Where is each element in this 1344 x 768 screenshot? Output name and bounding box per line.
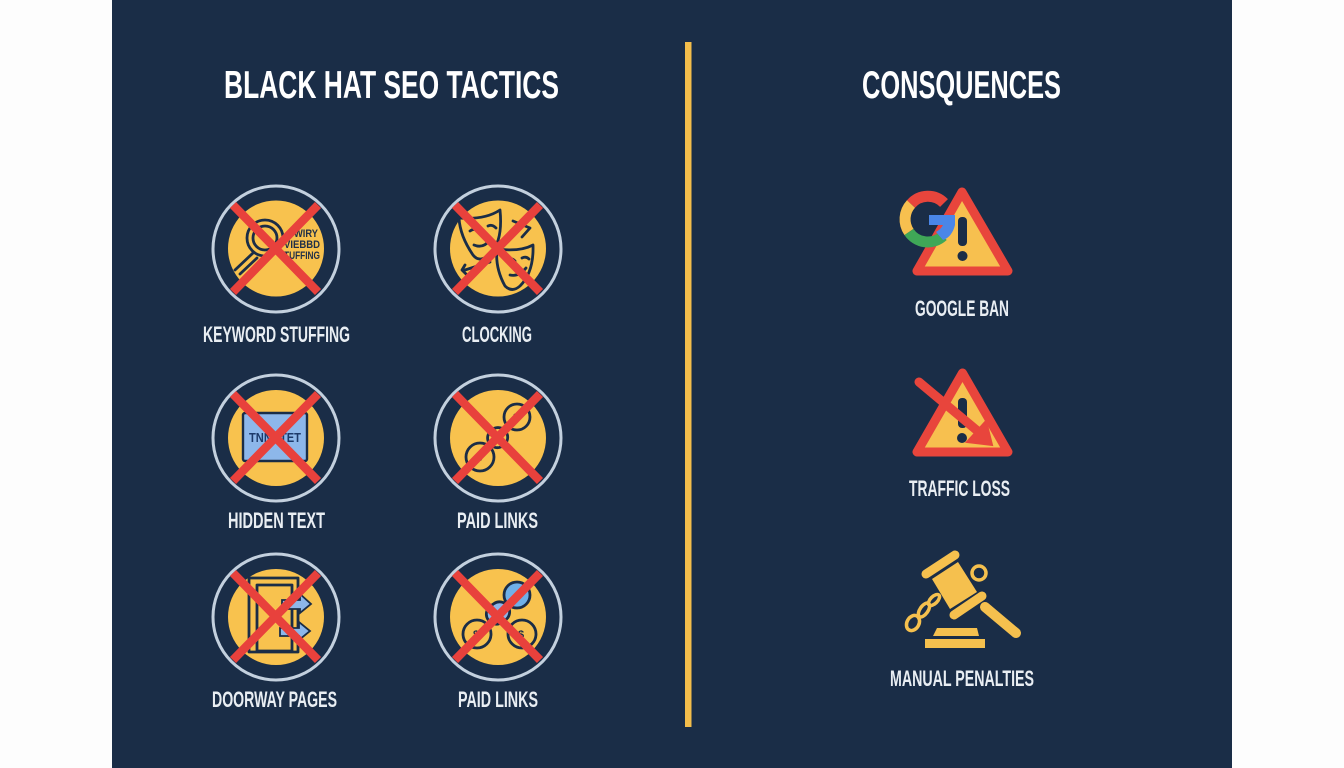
tactic: hidden text xyxy=(213,375,339,533)
consequence: google ban xyxy=(905,192,1009,321)
icon: crossed hidden text box: TNNNTET xyxy=(249,430,301,445)
icon: crossed magnifier over keywords: WIRY xyxy=(294,228,319,240)
tactic: doorway pages xyxy=(212,554,339,712)
label: TRAFFIC LOSS xyxy=(909,476,1010,501)
label: PAID LINKS xyxy=(458,687,538,712)
icon: crossed link network: $ xyxy=(518,629,524,641)
label: GOOGLE BAN xyxy=(915,296,1009,321)
icon: crossed chain of coins: $ xyxy=(476,452,482,464)
icon: crossed link network xyxy=(435,554,561,680)
icon: crossed magnifier over keywords: TUFFING xyxy=(284,250,320,262)
label: DOORWAY PAGES xyxy=(212,687,337,712)
icon: crossed magnifier over keywords: VIEBBD xyxy=(284,239,320,251)
tactic: cloaking xyxy=(435,186,561,347)
label: MANUAL PENALTIES xyxy=(890,666,1034,691)
consequence: manual penalties xyxy=(890,555,1034,691)
tactic: keyword stuffing xyxy=(203,186,350,347)
tactic: paid links (second) xyxy=(435,554,561,712)
label: PAID LINKS xyxy=(457,508,538,533)
icon: google G with warning triangle xyxy=(905,192,1008,271)
icon: warning triangle with falling arrow xyxy=(917,373,1008,452)
icon: crossed chain of coins xyxy=(435,375,561,501)
icon: gavel with broken chain xyxy=(904,555,1016,648)
label: KEYWORD STUFFING xyxy=(203,322,350,347)
heading: consequences: CONSQUENCES xyxy=(862,64,1061,107)
label: CLOCKING xyxy=(462,322,532,347)
icon: crossed link network: $ xyxy=(473,629,479,641)
tactic: paid links xyxy=(435,375,561,533)
label: HIDDEN TEXT xyxy=(228,508,325,533)
icon: crossed chain of coins: $ xyxy=(513,412,519,424)
icon: crossed hidden text box xyxy=(213,375,339,501)
divider xyxy=(685,42,692,727)
icon: crossed magnifier over keywords xyxy=(213,186,339,312)
icon: crossed door with arrows xyxy=(213,554,339,680)
heading: black hat SEO tactics: BLACK HAT SEO TACTICS xyxy=(224,64,559,107)
consequence: traffic loss xyxy=(909,373,1010,501)
icon: crossed theatre masks xyxy=(435,186,561,312)
